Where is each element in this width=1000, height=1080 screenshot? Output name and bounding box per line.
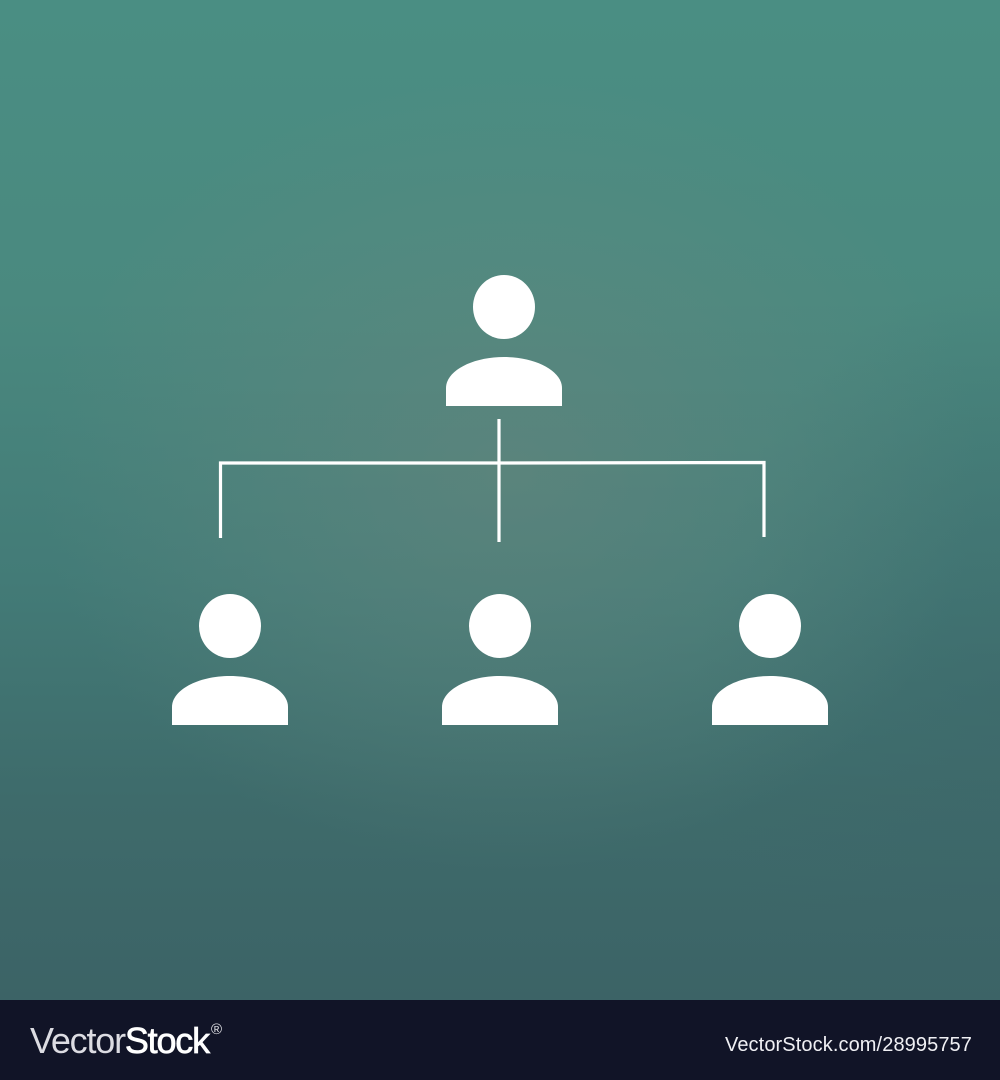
footer bar xyxy=(0,1000,1000,1080)
logo: VectorStock xyxy=(30,1020,209,1061)
image id url: VectorStock.com/28995757 xyxy=(725,1034,972,1056)
icon: middle person xyxy=(442,594,558,725)
footer bar: ® xyxy=(211,1021,222,1038)
icon: right person xyxy=(712,594,828,725)
icon: left person xyxy=(172,594,288,725)
connector lines xyxy=(220,419,764,542)
icon: top person xyxy=(446,275,562,406)
